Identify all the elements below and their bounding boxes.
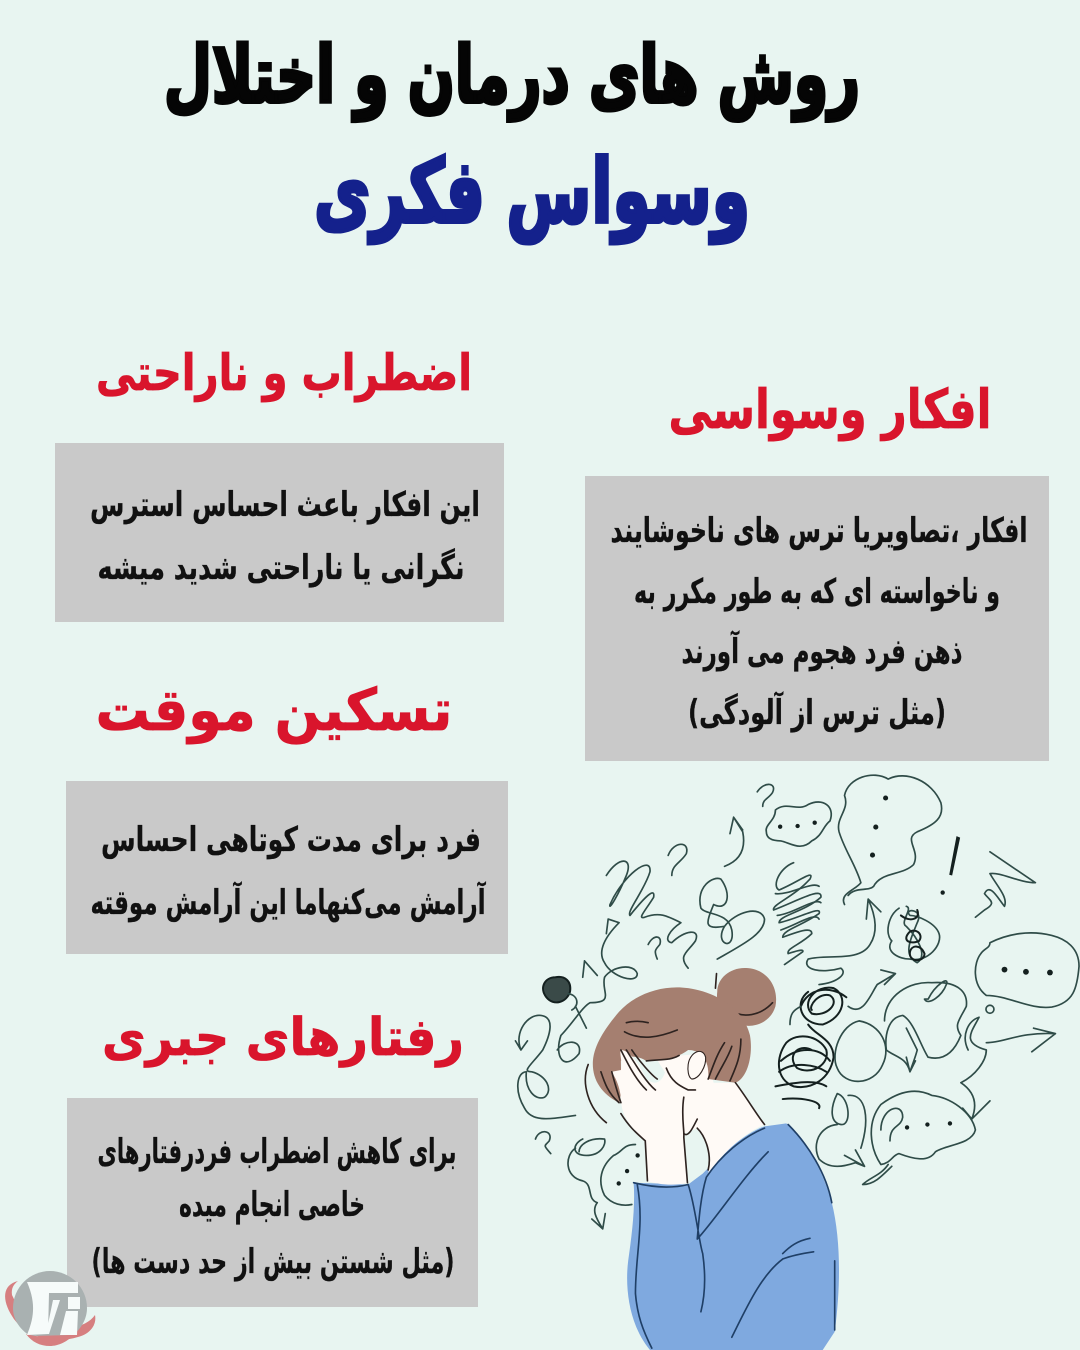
panel: anxiety and distress: اضطراب و ناراحتی: [96, 344, 472, 403]
logo: white monogram: [27, 1282, 80, 1335]
ear: [688, 1051, 706, 1079]
panel: temporary relief: [66, 676, 508, 954]
panel: compulsive behaviours: (مثل شستن بیش از حد دست ها): [92, 1242, 454, 1282]
panel: temporary relief: آرامش می‌کنهاما این آرامش موقته: [90, 881, 486, 923]
logo: red swoosh: [5, 1281, 95, 1340]
panel: compulsive behaviours: رفتارهای جبری: [102, 1008, 464, 1068]
panel: anxiety and distress: نگرانی یا ناراحتی شدید میشه: [98, 548, 464, 588]
logo: red lower arc: [26, 1333, 75, 1346]
panel: obsessive thoughts: (مثل ترس از آلودگی): [688, 691, 946, 733]
panel: anxiety and distress: این افکار باعث احساس استرس: [90, 485, 480, 525]
illustration: overwhelmed woman with tangled thoughts: [515, 775, 1079, 1350]
panel: compulsive behaviours: خاصی انجام میده: [179, 1185, 365, 1225]
icon: hair bun: [715, 968, 776, 1026]
title: [164, 31, 860, 244]
line work: [585, 1021, 835, 1348]
panel: compulsive behaviours: برای کاهش اضطراب فردرفتارهای: [98, 1132, 456, 1172]
logo: grey disc: [13, 1271, 87, 1336]
neck and face: [655, 1054, 765, 1174]
panel: obsessive thoughts: [585, 378, 1049, 761]
panel: compulsive behaviours: [67, 1008, 478, 1307]
sweater: [627, 1123, 839, 1350]
hands: [612, 1050, 688, 1185]
panel: temporary relief: تسکین موقت: [96, 676, 452, 745]
hair: [593, 987, 751, 1103]
panel: anxiety and distress: [55, 344, 504, 622]
title: وسواس فکری: [314, 140, 750, 244]
panel: obsessive thoughts: افکار وسواسی: [668, 378, 992, 441]
panel: temporary relief: فرد برای مدت کوتاهی احساس: [101, 820, 481, 860]
logo: [5, 1271, 95, 1346]
icon: thought scribbles: [515, 775, 1079, 1229]
